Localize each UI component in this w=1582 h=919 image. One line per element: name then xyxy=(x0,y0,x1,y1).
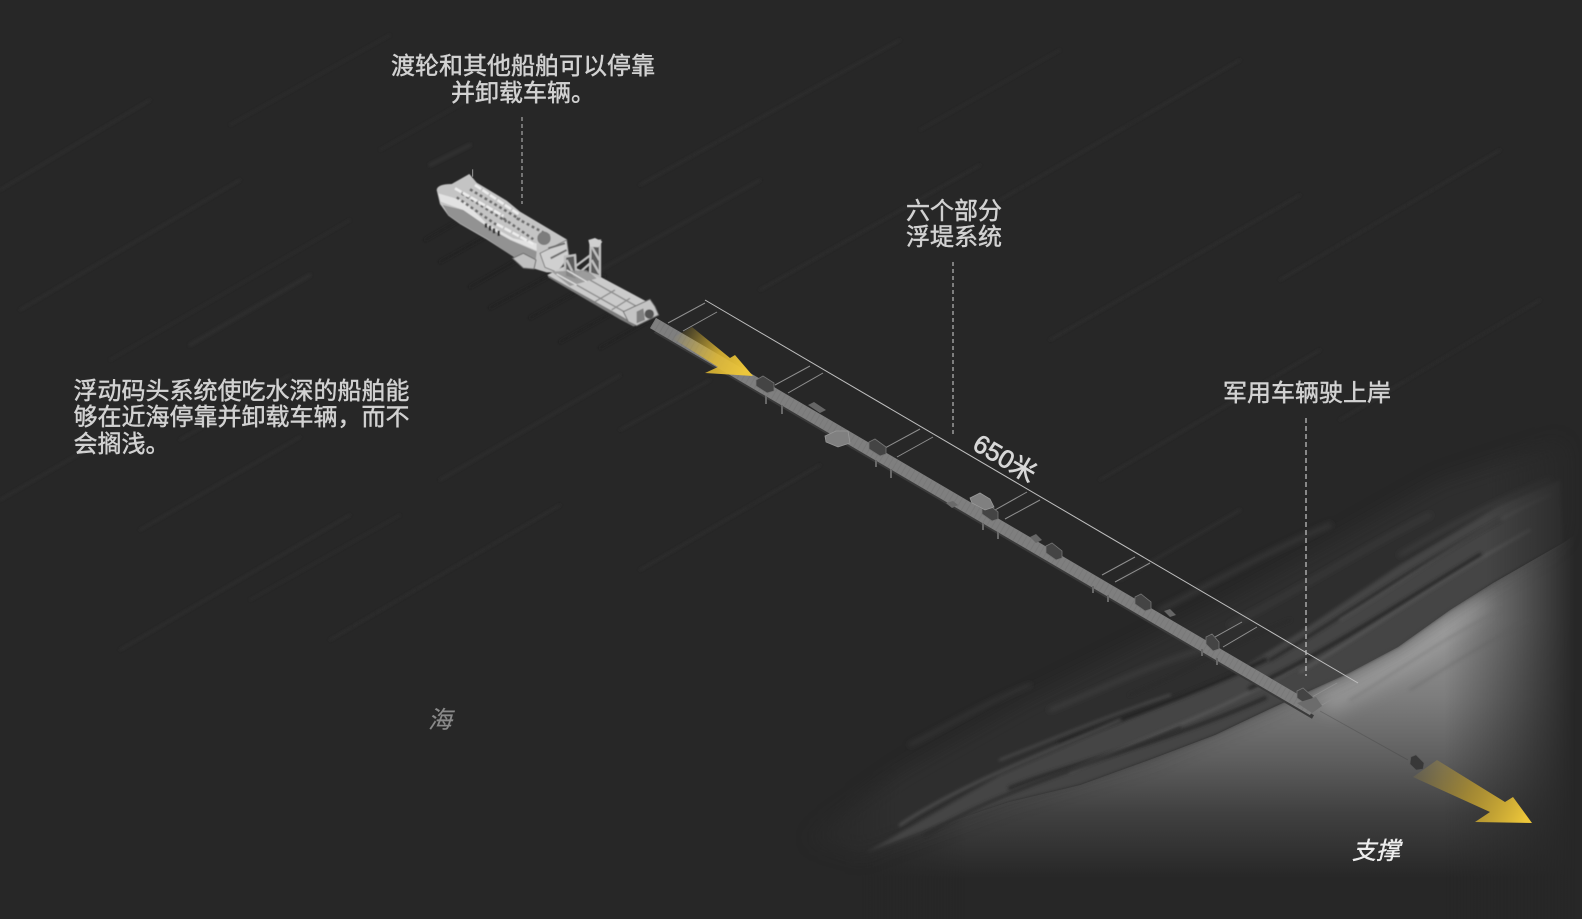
arrow: vehicles head to pier xyxy=(672,327,753,376)
beach land xyxy=(924,543,1564,856)
text: system description: 够在近海停靠并卸载车辆，而不 xyxy=(74,404,410,431)
arrow: vehicles drive ashore xyxy=(1413,760,1532,823)
dimension label: 650米 xyxy=(968,430,1041,488)
dimension line: 650 metres xyxy=(668,300,1358,705)
funnel dome xyxy=(537,232,551,245)
text: causeway: 六个部分 xyxy=(906,198,1002,224)
leader line: causeway xyxy=(952,262,954,437)
text: vehicles ashore: 军用车辆驶上岸 xyxy=(1223,380,1391,407)
text: system description: 会搁浅。 xyxy=(74,431,170,458)
text: causeway xyxy=(906,198,1002,251)
pier: six-section causeway xyxy=(653,323,1322,717)
label: support: 支撑 xyxy=(1352,838,1400,865)
vehicle on shore xyxy=(1410,755,1424,770)
crane tower frame xyxy=(565,241,600,280)
stern block xyxy=(540,240,569,272)
text: ships can dock: 渡轮和其他船舶可以停靠 xyxy=(391,53,655,80)
label: sea: 海 xyxy=(428,707,452,734)
text: ships can dock xyxy=(391,53,655,107)
ship: ferry docked at platform xyxy=(437,169,659,326)
text: ships can dock: 并卸载车辆。 xyxy=(451,80,595,107)
text: causeway: 浮堤系统 xyxy=(906,224,1002,251)
water streaks background xyxy=(0,35,1540,650)
superstructure detail xyxy=(457,189,550,239)
leader line: landing xyxy=(1305,418,1307,676)
hull lower band xyxy=(443,205,537,267)
text: system description xyxy=(74,378,410,458)
pier end ramp xyxy=(1297,697,1322,713)
wet sand highlight xyxy=(1312,597,1492,715)
white hull sweep xyxy=(438,193,537,251)
loading platform xyxy=(547,265,658,326)
side boat xyxy=(513,253,536,269)
platform end cap xyxy=(623,299,659,326)
mast xyxy=(471,169,474,177)
pier connectors xyxy=(756,376,1313,705)
small boats on pier xyxy=(808,402,1176,617)
faint track to shore xyxy=(1320,711,1408,760)
pier legs xyxy=(766,396,1217,665)
text: system description: 浮动码头系统使吃水深的船舶能 xyxy=(74,378,410,404)
shoreline waves xyxy=(872,485,1554,850)
leader line: ship xyxy=(521,117,523,204)
